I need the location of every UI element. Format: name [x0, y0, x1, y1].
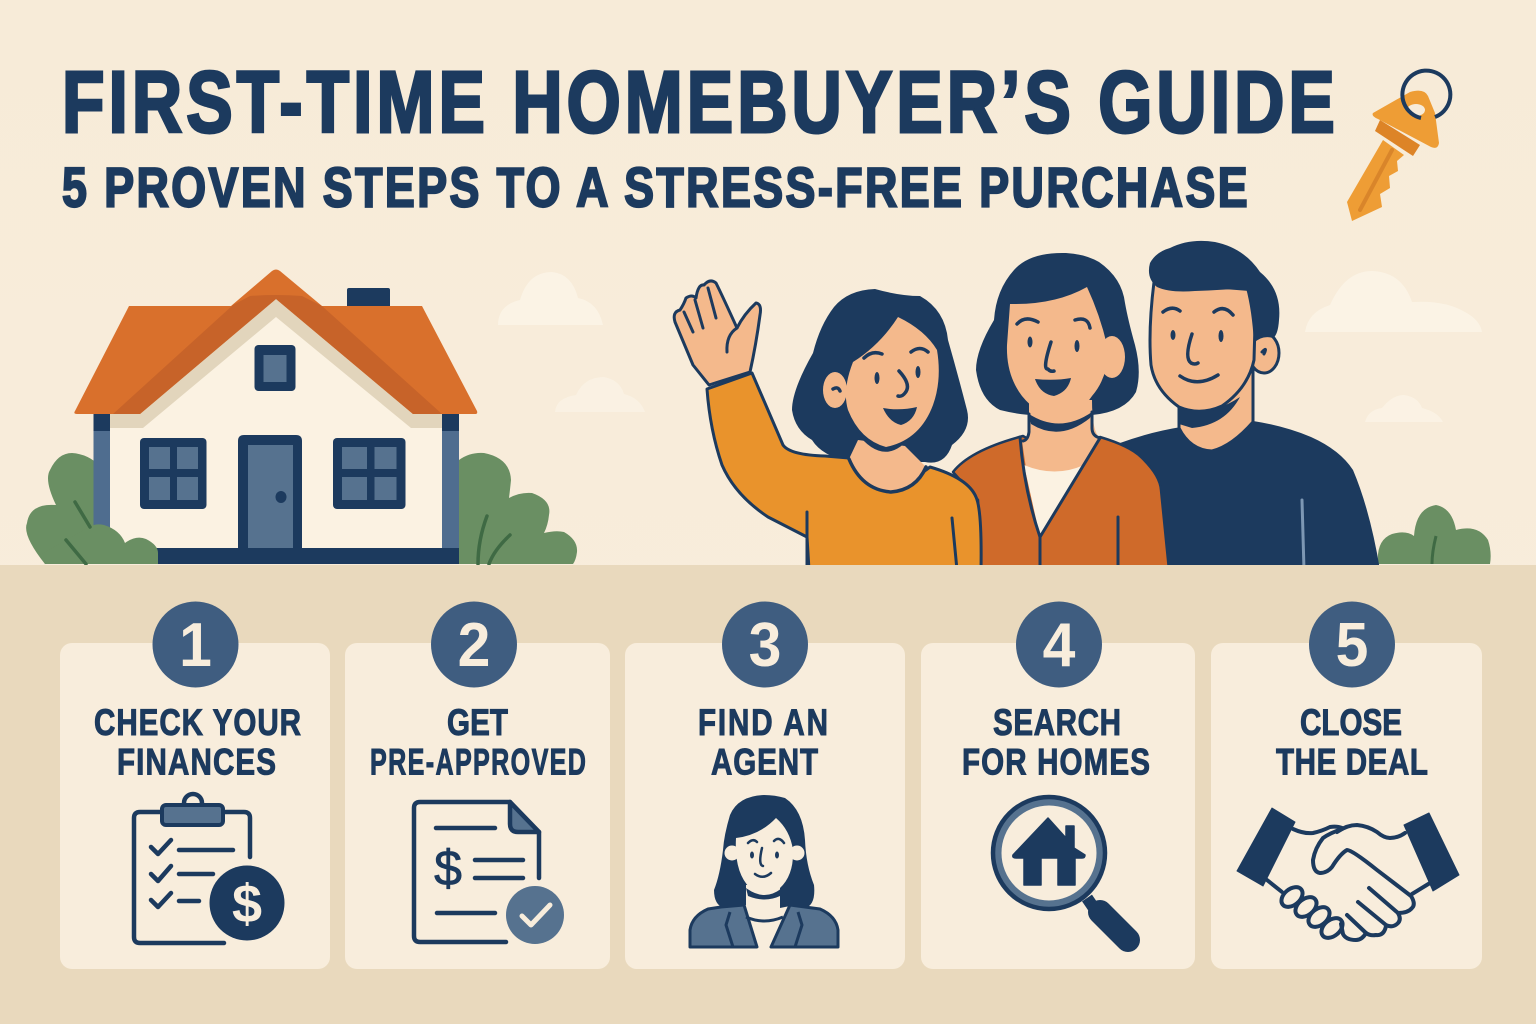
number badge 2: [431, 602, 517, 688]
centre woman ear: [1099, 336, 1125, 378]
subtitle: 5 PROVEN STEPS TO A STRESS-FREE PURCHASE: [62, 156, 1248, 219]
man neck shadow: [1179, 397, 1240, 428]
centre woman cardigan: [953, 436, 1169, 570]
bush right of family: [1378, 505, 1491, 564]
agent hair: [714, 795, 814, 908]
left woman features: [833, 348, 928, 425]
man hair: [1149, 241, 1279, 343]
card 1 background: [60, 643, 330, 969]
heading: find an agent: AGENT: [711, 742, 819, 783]
left woman hair: [792, 289, 968, 463]
left window: [140, 438, 206, 509]
left woman face: [846, 317, 939, 447]
heading: get pre-approved: PRE-APPROVED: [370, 741, 586, 783]
agent neck and shirt: [744, 885, 790, 947]
left woman: [674, 281, 981, 570]
cloud 1: [498, 272, 603, 325]
centre woman face: [1007, 287, 1107, 418]
heading: check your finances: CHECK YOUR: [94, 703, 301, 744]
number badge 1: 1: [179, 610, 212, 679]
step 2 card: [345, 602, 610, 969]
house illustration: [74, 270, 477, 564]
cloud 4: [1365, 395, 1443, 422]
step 5 card: [1211, 602, 1482, 969]
bush right of house: [459, 453, 577, 564]
bush behind house left: [26, 453, 100, 564]
cloud 3: [1305, 271, 1482, 332]
centre woman neck: [1022, 400, 1100, 473]
step 1 card: [60, 602, 330, 969]
man facial features: [1163, 308, 1233, 382]
right window: [333, 438, 406, 509]
step 4 card: [921, 602, 1195, 969]
heading: get pre-approved: GET: [447, 703, 508, 744]
left woman sleeve seams: [807, 512, 957, 570]
heading: search for homes: SEARCH: [993, 703, 1121, 744]
heading: find an agent: [698, 703, 828, 783]
door: [238, 435, 302, 549]
icon: handshake: [1237, 808, 1459, 942]
house posts: [94, 413, 459, 549]
house wall: [110, 299, 442, 549]
card 2 background: [345, 643, 610, 969]
card 5 background: [1211, 643, 1482, 969]
heading: check your finances: FINANCES: [117, 742, 276, 783]
title: FIRST-TIME HOMEBUYER’S GUIDE: [62, 54, 1335, 151]
heading: find an agent: FIND AN: [698, 703, 828, 744]
left woman neck: [849, 440, 926, 492]
number badge 5: [1309, 602, 1395, 688]
roof shadow: [110, 299, 442, 428]
icon: agent portrait: [690, 795, 838, 947]
man: [1120, 241, 1380, 570]
icon: clipboard with dollar: [134, 794, 284, 943]
number badge 5: 5: [1336, 610, 1368, 679]
man ear: [1249, 333, 1279, 373]
number badge 4: [1016, 602, 1102, 688]
number badge 1: [152, 602, 238, 688]
heading: get pre-approved: [370, 703, 586, 783]
heading: search for homes: [962, 703, 1150, 783]
step 3 card: [625, 602, 905, 969]
cloud 2: [555, 377, 645, 412]
chimney: [347, 288, 390, 308]
agent jacket: [690, 905, 838, 947]
heading: search for homes: FOR HOMES: [962, 742, 1150, 783]
card 3 background: [625, 643, 905, 969]
icon: key: [1347, 71, 1450, 221]
family illustration: [674, 241, 1380, 570]
number badge 2: 2: [458, 610, 490, 679]
left woman ear: [823, 372, 847, 408]
centre woman cardigan edge: [1020, 437, 1118, 570]
icon: document with check: [414, 802, 564, 944]
heading: check your finances: [94, 703, 301, 783]
centre woman: [953, 253, 1169, 570]
number badge 3: [722, 602, 808, 688]
centre woman shirt: [1024, 465, 1084, 537]
number badge 4: 4: [1043, 610, 1076, 679]
man shirt seam: [1302, 500, 1304, 570]
number badge 3: 3: [749, 610, 781, 679]
centre woman hair: [976, 253, 1139, 415]
left woman sweater: [707, 373, 981, 570]
attic window: [254, 345, 296, 391]
icon: clipboard with dollar: $: [232, 874, 262, 934]
steps band: [0, 565, 1536, 1024]
icon: magnifier with house: [993, 797, 1128, 940]
heading: close the deal: [1276, 703, 1428, 783]
roof: [74, 270, 477, 414]
centre woman features: [1017, 319, 1090, 396]
bush front of house left: [40, 502, 158, 564]
foundation: [94, 548, 459, 564]
man neck: [1179, 370, 1253, 451]
heading: close the deal: CLOSE: [1300, 703, 1402, 744]
man face: [1150, 282, 1256, 411]
heading: close the deal: THE DEAL: [1276, 742, 1428, 783]
man shirt: [1120, 421, 1380, 570]
left woman hand: [674, 281, 760, 385]
card 4 background: [921, 643, 1195, 969]
icon: document with check: $: [434, 840, 462, 896]
